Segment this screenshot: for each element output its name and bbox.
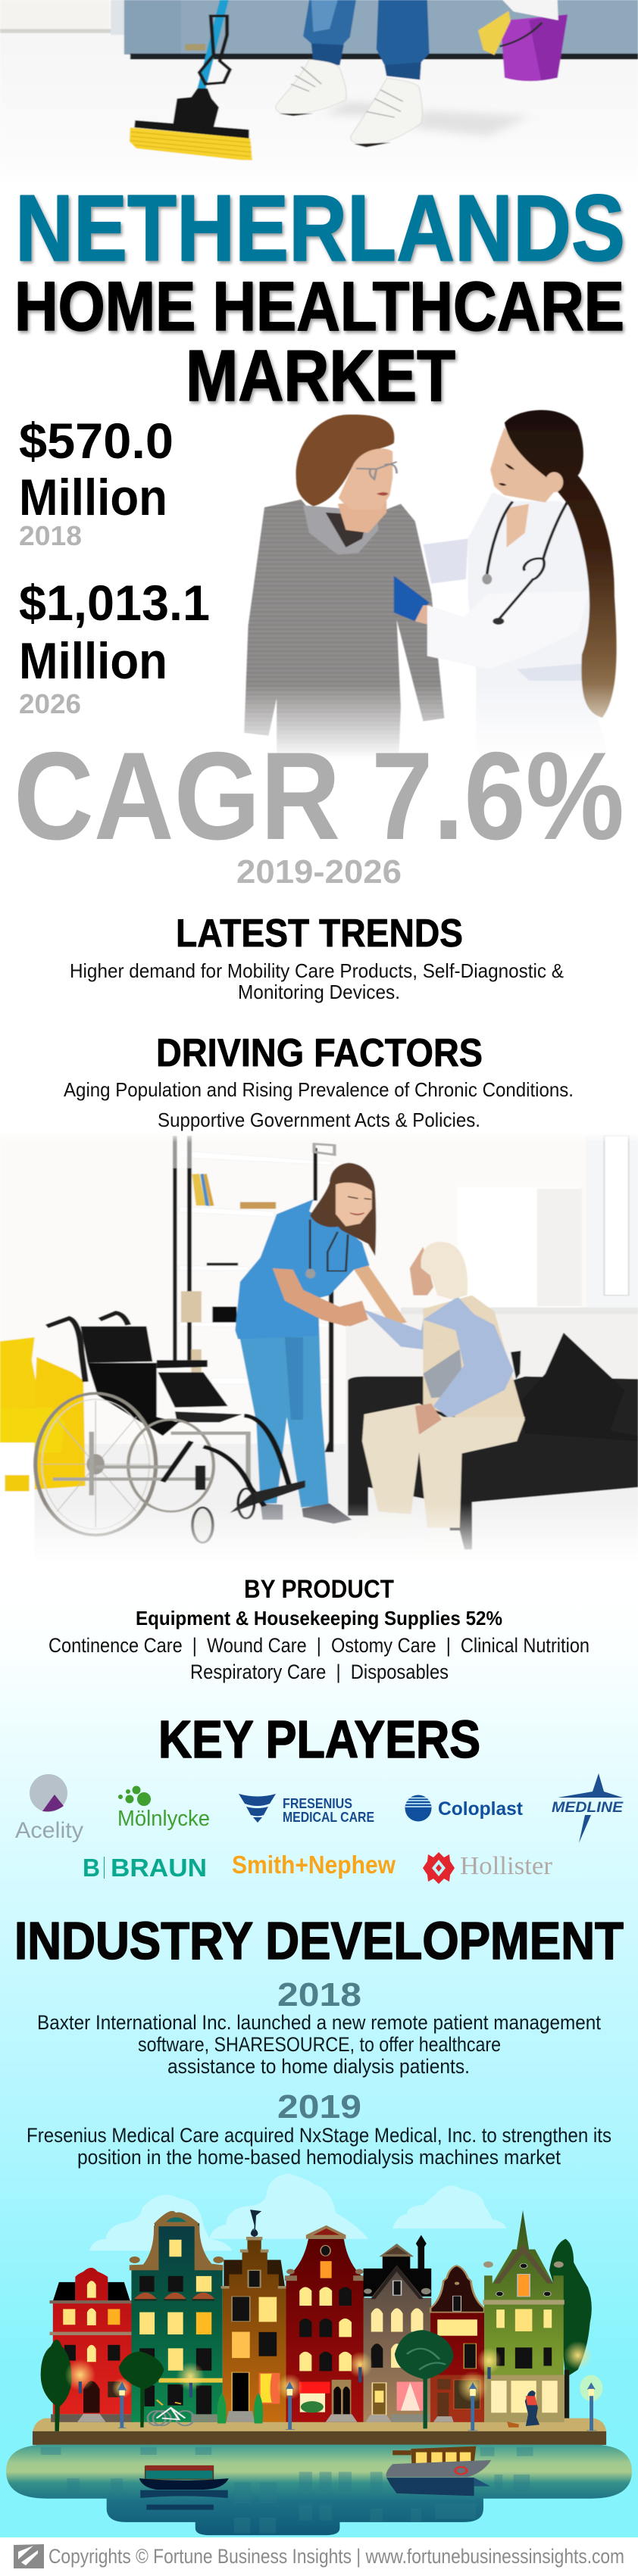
development 2018: 2018 xyxy=(277,1976,361,2013)
photo: doctor helping patient xyxy=(0,410,638,768)
man xyxy=(352,1242,525,1563)
reflected houses xyxy=(41,2447,533,2534)
development 2019: 2019 xyxy=(277,2088,361,2125)
development 2019 xyxy=(27,2088,611,2169)
olive green house xyxy=(483,2210,565,2422)
street lamps xyxy=(64,2341,602,2431)
weather vane xyxy=(250,2210,261,2236)
section: driving factors: Supportive Government Acts & Policies. xyxy=(158,1109,480,1131)
logo: B Braun: BRAUN xyxy=(111,1854,207,1882)
CAGR period: 2019-2026 xyxy=(236,853,402,890)
section: by product: Respiratory Care | Disposables xyxy=(190,1661,449,1683)
stat: 2018 market value xyxy=(19,413,174,551)
heading: key players: KEY PLAYERS xyxy=(158,1710,480,1769)
section: by product: Equipment & Housekeeping Supplies 52% xyxy=(136,1607,502,1629)
logo: Acelity: Acelity xyxy=(15,1818,83,1843)
illustration: Dutch canal houses xyxy=(6,2173,632,2535)
canal water xyxy=(6,2445,632,2535)
nurse xyxy=(235,1163,407,1523)
tree behind right house xyxy=(549,2239,592,2378)
trees xyxy=(41,2330,454,2431)
cyan gradient backdrop xyxy=(0,1567,638,2537)
boat: tour boat xyxy=(139,2465,229,2510)
logo: Hollister xyxy=(423,1852,553,1884)
logo: Acelity xyxy=(15,1774,83,1843)
logo: Coloplast: Coloplast xyxy=(438,1798,524,1820)
photo: mopping the floor xyxy=(0,0,638,189)
section: by product xyxy=(48,1575,590,1683)
logo: B Braun: B xyxy=(83,1854,100,1882)
grey house xyxy=(364,2235,431,2422)
photo: nurse helping elderly man with wheelchair xyxy=(0,1132,638,1570)
wheelchair xyxy=(36,1313,305,1542)
development 2018: assistance to home dialysis patients. xyxy=(167,2055,470,2078)
stat: 2026 market value: $1,013.1 xyxy=(19,575,210,631)
logo: Fresenius Medical Care: MEDICAL CARE xyxy=(283,1810,374,1825)
dark red house xyxy=(285,2225,365,2422)
stat: 2026 market value xyxy=(19,575,210,719)
stat: 2018 market value: Million xyxy=(19,469,167,526)
woman with dog xyxy=(507,2390,539,2428)
title: Market: MARKET xyxy=(186,335,455,416)
stat: 2018 market value: 2018 xyxy=(19,520,82,551)
logo: Fresenius Medical Care: FRESENIUS xyxy=(283,1796,352,1811)
development 2018: software, SHARESOURCE, to offer healthcare xyxy=(138,2033,501,2056)
section: driving factors xyxy=(64,1031,574,1131)
small dark red house xyxy=(430,2266,484,2422)
stat: 2026 market value: Million xyxy=(19,632,167,690)
section: by product: BY PRODUCT xyxy=(244,1575,394,1604)
canal bank xyxy=(33,2431,606,2445)
sidewalk xyxy=(33,2419,606,2432)
logo: Medline: MEDLINE xyxy=(552,1800,624,1816)
boat: houseboat xyxy=(386,2447,491,2496)
logo: Smith+Nephew: Smith+Nephew xyxy=(232,1851,396,1879)
logos xyxy=(15,1773,624,1884)
bicycles xyxy=(148,2400,194,2425)
logo: Coloplast xyxy=(405,1795,524,1822)
development 2019: position in the home-based hemodialysis machines market xyxy=(77,2146,561,2169)
logo: Molnlycke: Mölnlycke xyxy=(117,1807,210,1831)
section: driving factors: Aging Population and Rising Prevalence of Chronic Conditions. xyxy=(64,1078,574,1101)
footer logo xyxy=(14,2544,44,2568)
red house xyxy=(50,2268,134,2422)
logo: Fresenius Medical Care xyxy=(239,1794,374,1825)
logo: Molnlycke xyxy=(117,1785,210,1831)
logo: Medline xyxy=(552,1773,624,1843)
section: latest trends: Monitoring Devices. xyxy=(238,981,400,1003)
clouds xyxy=(89,2173,507,2250)
section: driving factors: DRIVING FACTORS xyxy=(156,1031,483,1075)
stat: 2018 market value: $570.0 xyxy=(19,413,174,469)
stat: 2026 market value: 2026 xyxy=(19,688,81,719)
footer bar xyxy=(0,2537,638,2576)
section: latest trends: LATEST TRENDS xyxy=(176,912,463,956)
section: latest trends xyxy=(70,912,564,1003)
stepped brown house xyxy=(217,2237,286,2424)
section: latest trends: Higher demand for Mobility Care Products, Self-Diagnostic & xyxy=(70,959,564,982)
logo: Hollister: Hollister xyxy=(460,1852,553,1880)
development 2018 xyxy=(37,1976,601,2078)
teal green house xyxy=(130,2211,224,2422)
